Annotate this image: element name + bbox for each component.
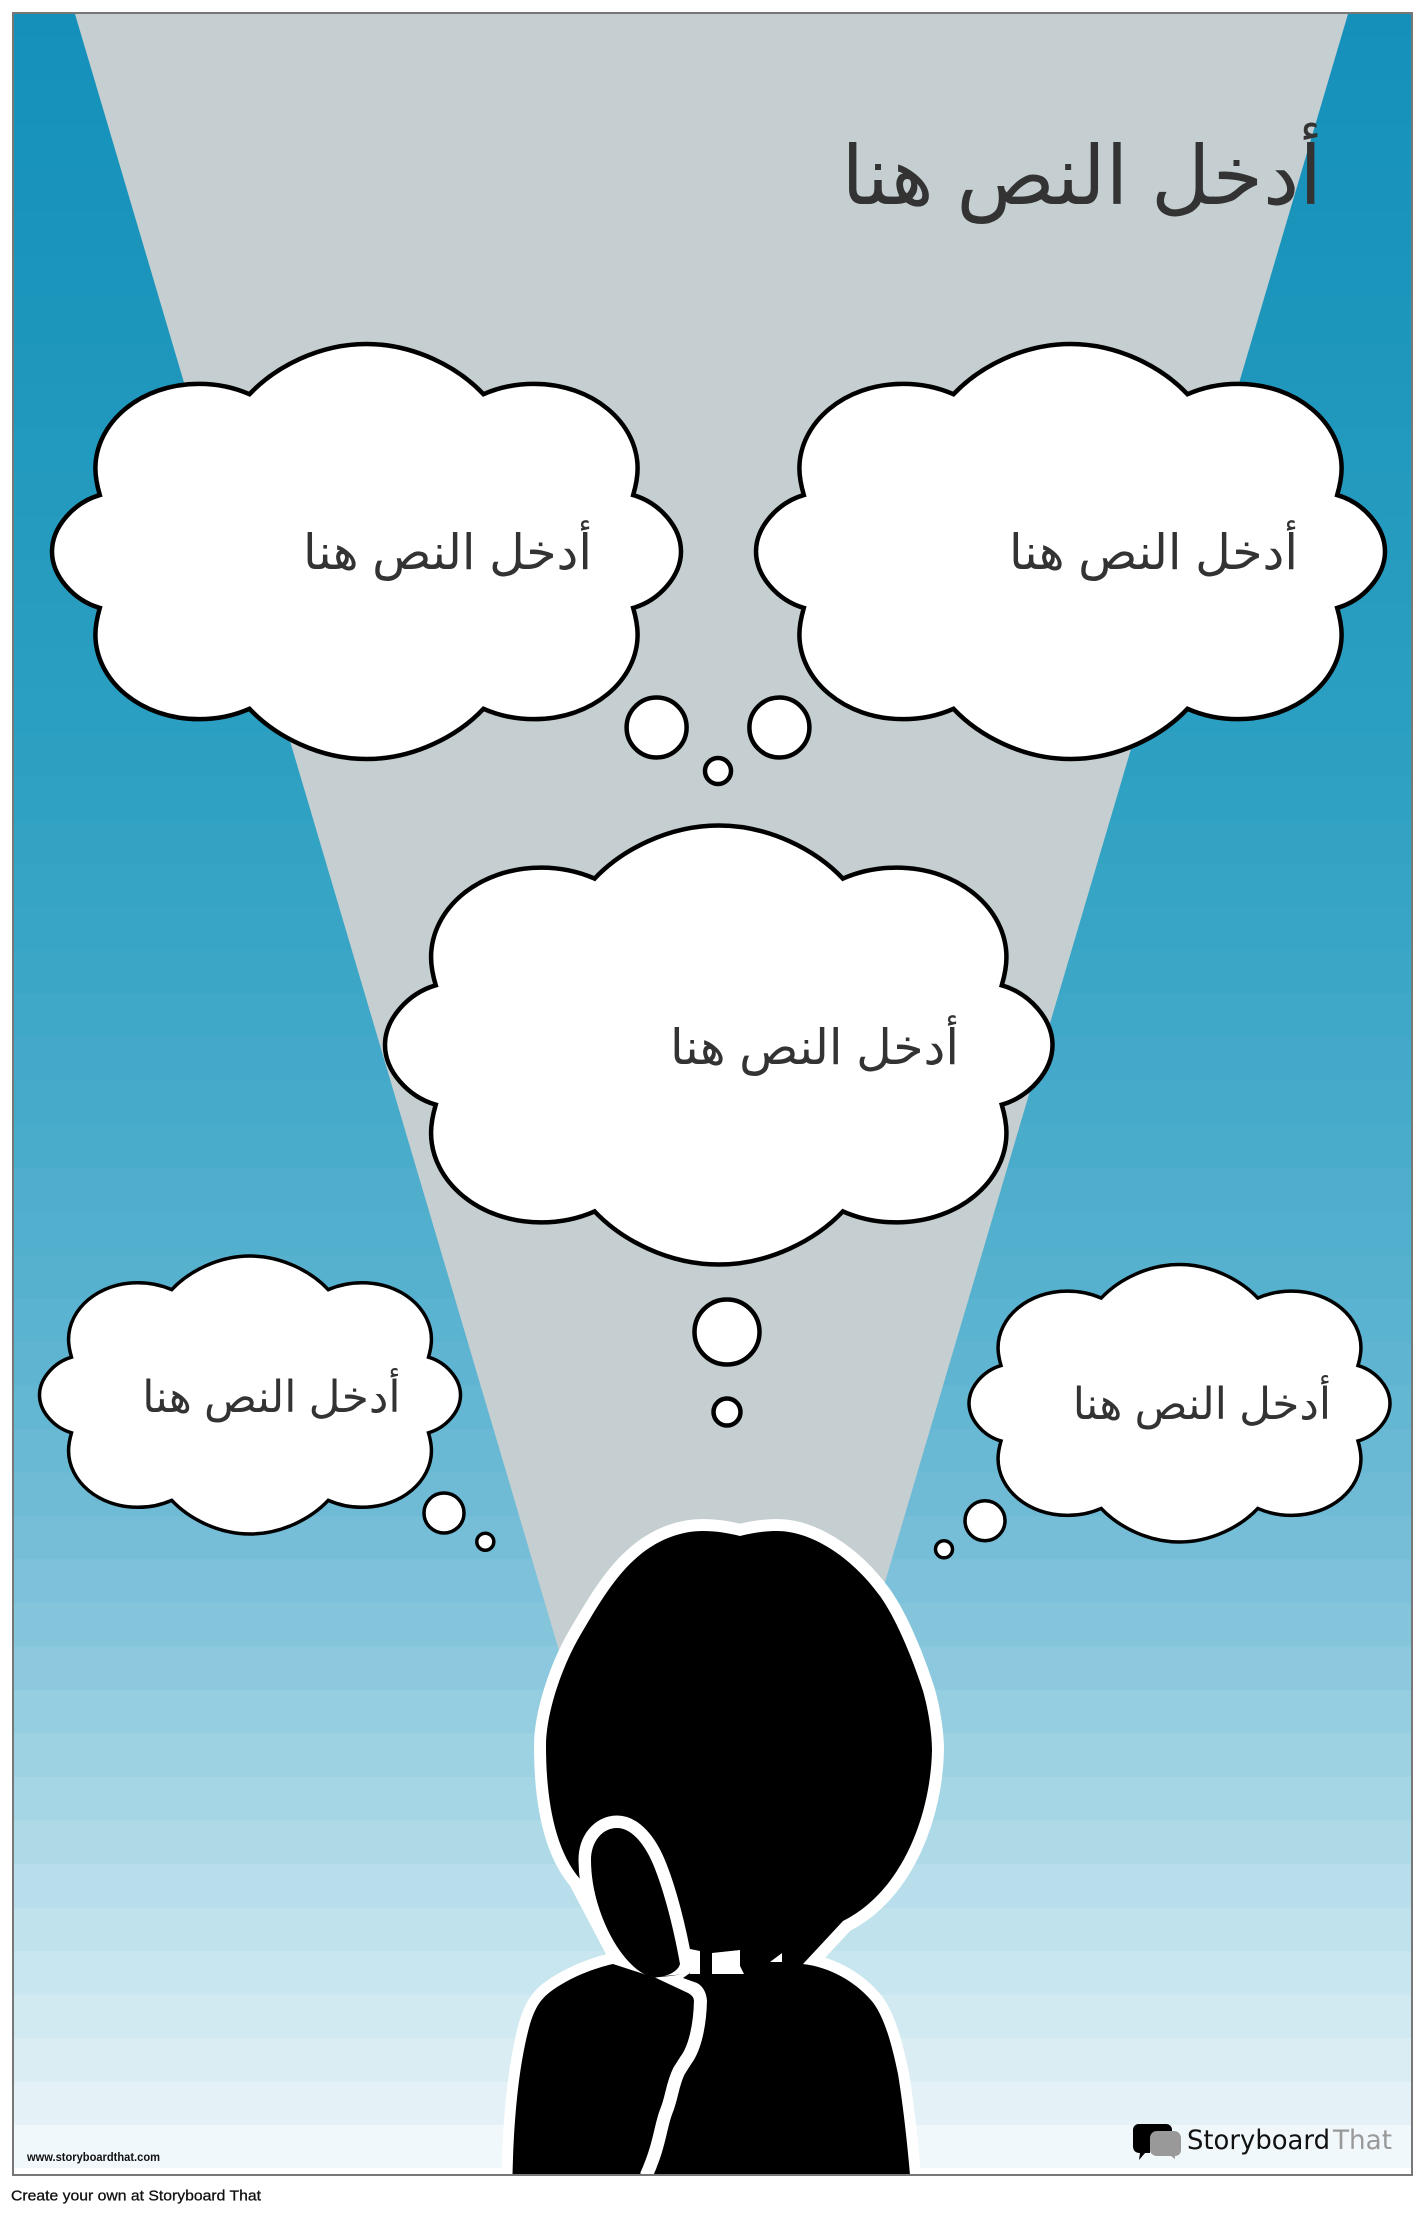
cloud shape [52, 344, 681, 759]
torso white outline [512, 1964, 910, 2175]
thought cloud: top right [756, 344, 1385, 759]
cloud shape [40, 1256, 460, 1534]
cloud text: أدخل النص هنا [142, 1368, 400, 1423]
silhouette of thinking person [512, 1531, 932, 2176]
logo icon: speech bubbles [1133, 2124, 1181, 2160]
cloud shape [385, 826, 1053, 1264]
thought cloud: lower right [969, 1264, 1390, 1542]
cloud text: أدخل النص هنا [670, 1015, 959, 1076]
head [546, 1531, 932, 1974]
thought bubbles: below centre cloud [694, 1300, 760, 1426]
thought bubbles: lower left [424, 1493, 494, 1550]
storyboard that logo [1133, 2124, 1392, 2160]
thought cloud: centre [385, 826, 1053, 1264]
thought cloud: lower left [40, 1256, 460, 1534]
thought bubbles: between top clouds [627, 698, 809, 784]
arm separator line [646, 2000, 700, 2176]
title: أدخل النص هنا [841, 123, 1322, 224]
logo wordmark: That [1332, 2125, 1392, 2156]
cloud text: أدخل النص هنا [1009, 520, 1298, 581]
website watermark: www.storyboardthat.com [26, 2152, 160, 2164]
thought bubbles: lower right [936, 1501, 1005, 1558]
thought cloud: top left [52, 344, 681, 759]
footer credit: Create your own at Storyboard That [11, 2188, 262, 2204]
arm wedge [655, 1973, 707, 2001]
cloud shape [969, 1264, 1390, 1542]
neck gaps [690, 1949, 782, 1976]
logo wordmark: Storyboard [1187, 2125, 1330, 2156]
cloud shape [756, 344, 1385, 759]
cloud text: أدخل النص هنا [1073, 1375, 1331, 1430]
torso and arm [512, 1964, 910, 2175]
hand [591, 1828, 680, 1977]
cloud text: أدخل النص هنا [303, 520, 592, 581]
